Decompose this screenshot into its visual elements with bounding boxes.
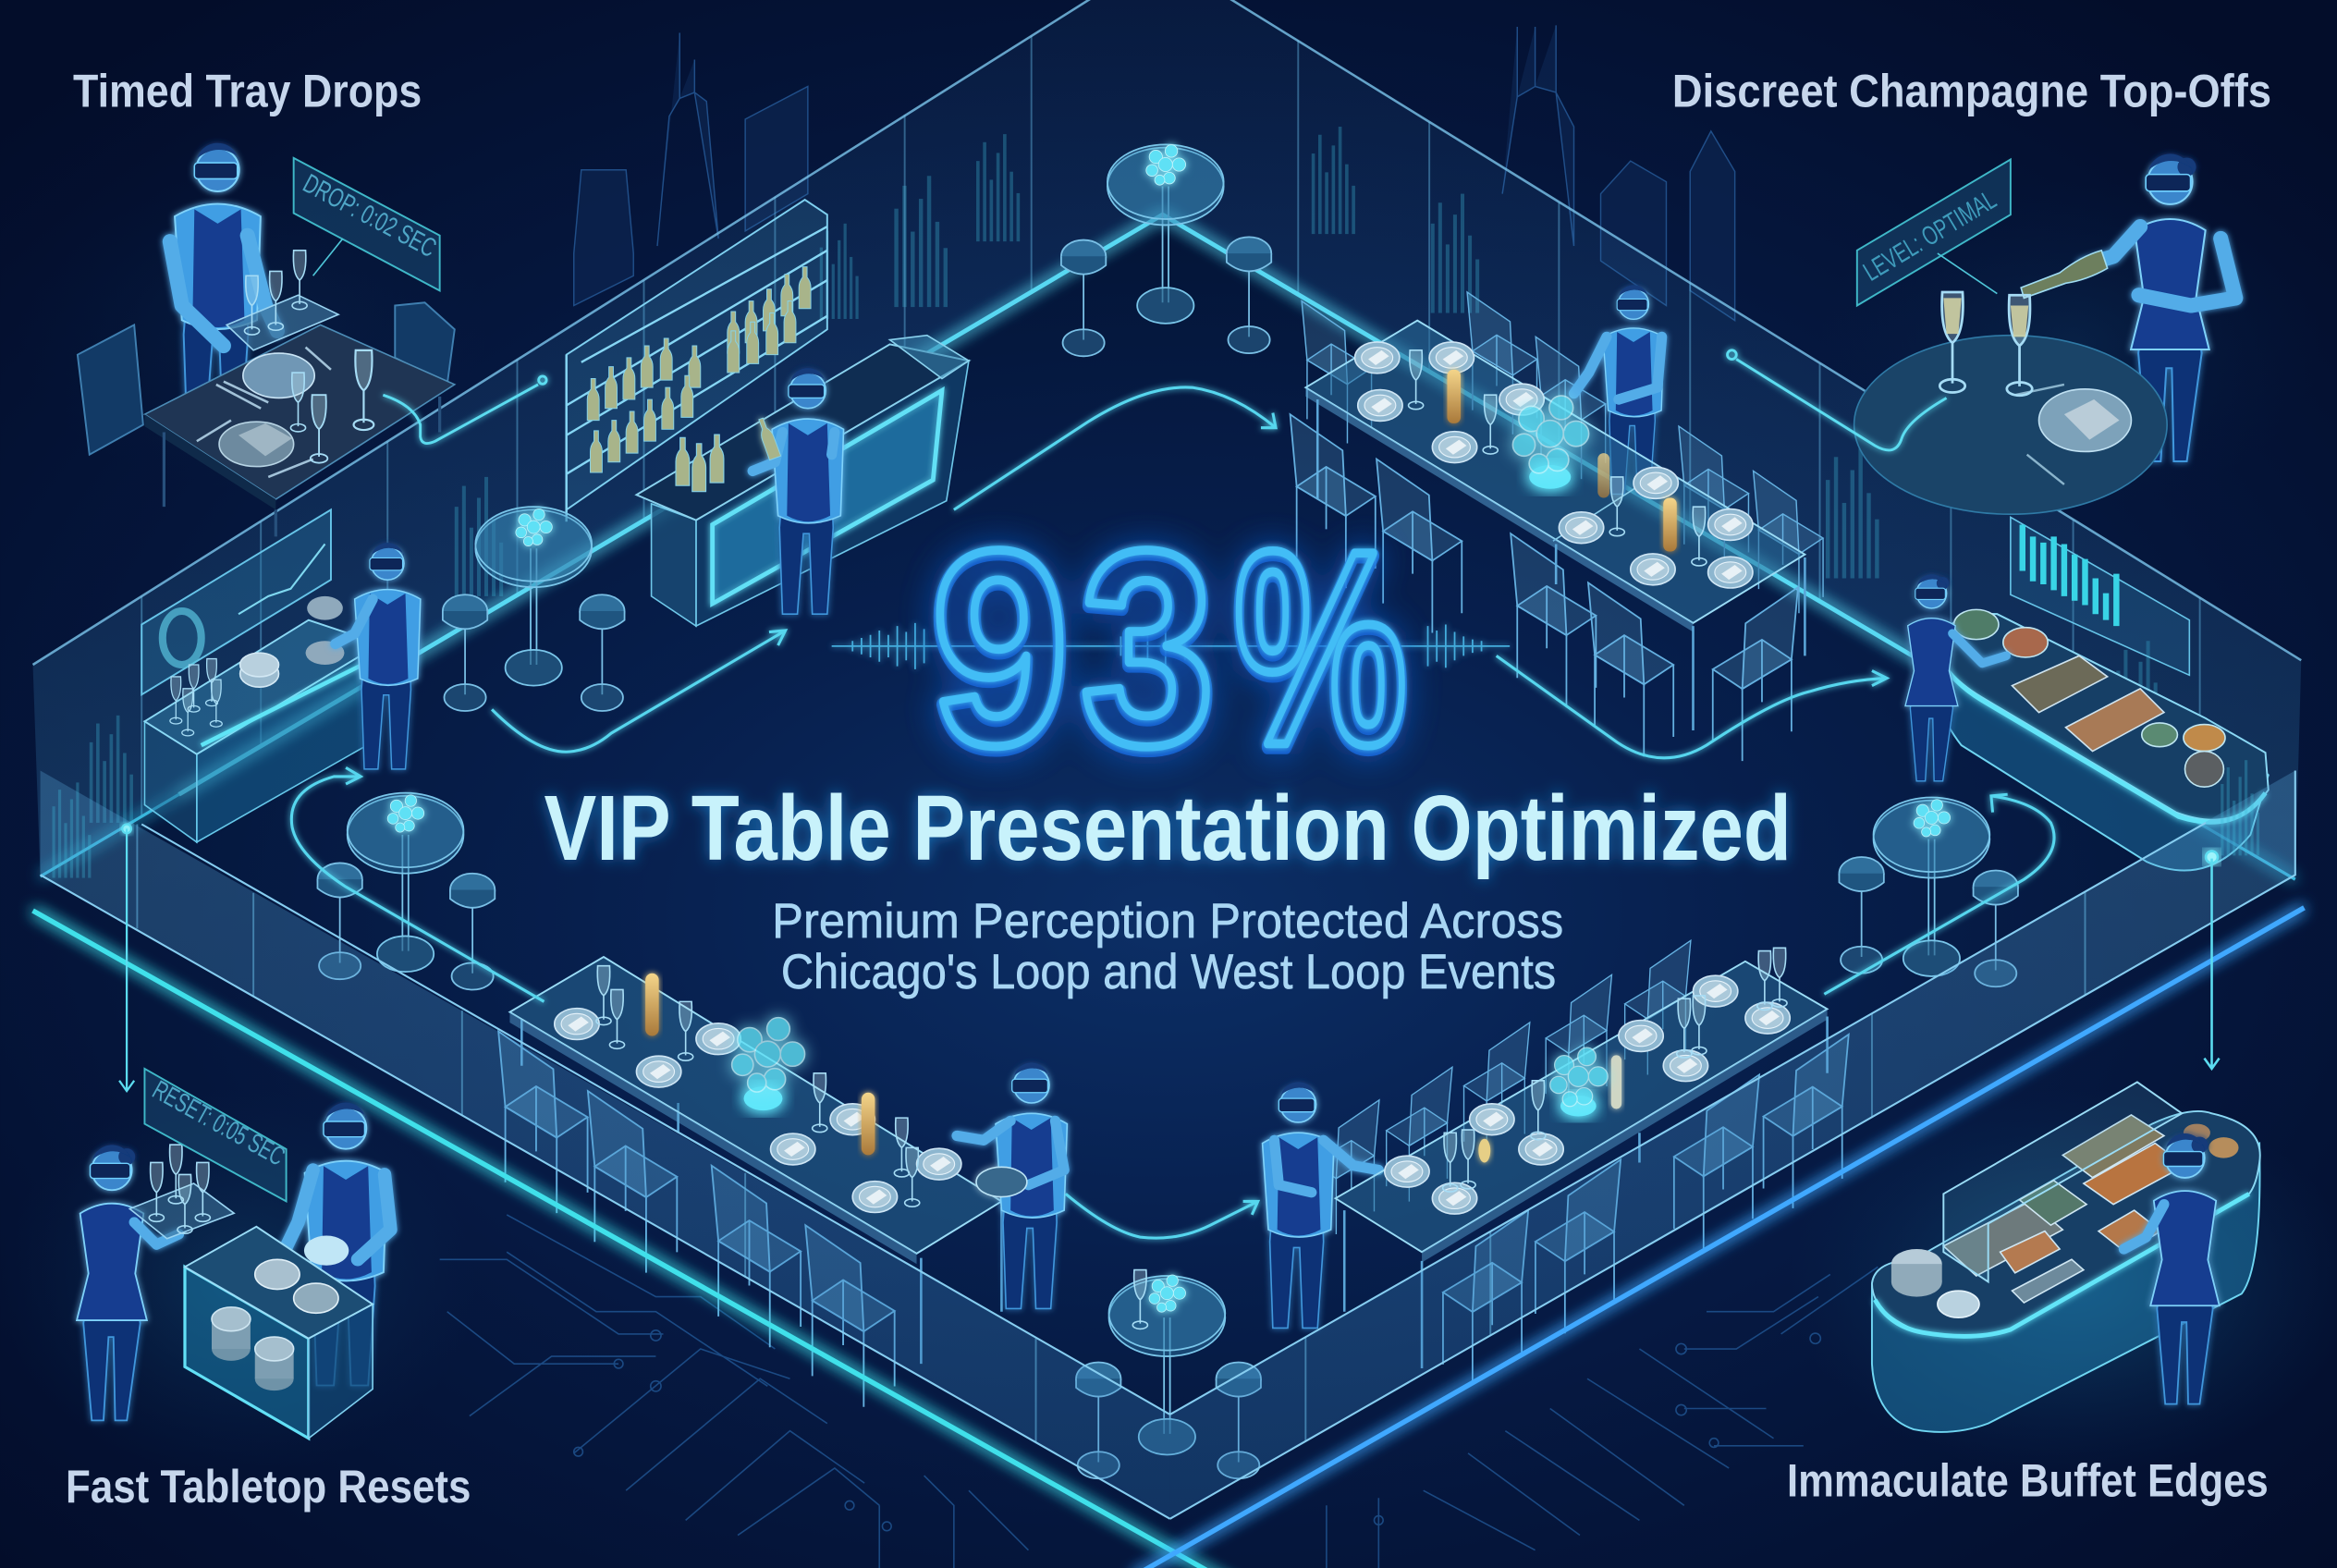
headline stat: 93% [932,493,1407,806]
glow layer: 9 [932,496,1069,806]
sign: drop time: DROP: 0:02 SEC [298,169,441,263]
tray and glasses [129,1145,234,1239]
glow layer: % [1234,496,1407,806]
vignette: discreet champagne top-offs [1728,153,2235,514]
label: discreet champagne top-offs: Discreet Champagne Top-Offs [1672,65,2271,116]
interior floor [41,214,2295,1513]
round table [1854,336,2167,514]
counter [1872,1111,2260,1432]
vertical pointer: right [2204,851,2220,1069]
sign: reset time [144,1069,289,1201]
long table: upper right [1291,285,1823,761]
server [2123,1133,2220,1404]
Chicago skyline [574,25,1735,321]
vignette: timed tray drops [78,143,546,536]
bottle and flutes [1939,251,2108,396]
panel: front-left wall [41,770,1170,1519]
tray and glasses [226,251,338,350]
vertical pointer: left [119,825,134,1091]
panel: back-right glass wall [1159,0,2301,879]
server [336,543,421,769]
tabletop [509,957,1001,1364]
neon outline: 3 [1081,493,1215,802]
near chairs [1291,414,1798,761]
centre waveform [832,623,1510,669]
main title: VIP Table Presentation Optimized [544,778,1792,880]
arrow: lower left [291,767,544,1001]
table chairs [78,302,455,455]
server [1263,1082,1378,1328]
panel: front-right wall [1170,760,2295,1519]
high table: lower left [317,793,495,989]
long table: lower left [498,957,1067,1407]
server pouring [2084,153,2235,461]
subtitle line 1: Premium Perception Protected Across [772,894,1563,949]
cart [185,1227,373,1439]
place settings [197,348,373,477]
panel: back-left glass wall [33,0,1163,876]
vignette: right buffet [1905,517,2269,871]
far chairs [1302,292,1823,613]
neon line: front-right [1132,908,2304,1568]
server [1574,285,1664,494]
bar counter [636,336,969,626]
glow layer [932,496,1407,806]
high table: centre bottom [1076,1270,1261,1478]
server [1905,574,2006,781]
connector [1728,350,1947,450]
label: fast tabletop resets: Fast Tabletop Resets [66,1461,471,1513]
station counter [144,596,380,842]
front glass walls [33,760,2304,1568]
sign: drop time [294,158,441,290]
analytics screen [141,509,331,694]
label: immaculate buffet edges: Immaculate Buffet Edges [1787,1455,2269,1507]
tabletop [1336,948,1828,1368]
arrow: lower centre [1066,1194,1258,1238]
arrow: to right buffet [1497,655,1887,758]
neon floor line: back [41,214,2295,879]
vignette: left service station [141,509,421,842]
vignette: fast tabletop resets [77,1069,390,1439]
bartender [752,368,844,614]
arrow: up right [1824,794,2054,994]
vignette: immaculate buffet edges [1872,1082,2260,1432]
server with plate [280,1103,390,1386]
label: timed tray drops: Timed Tray Drops [73,65,422,116]
flow arrows [291,387,2054,1238]
sneeze guard [1943,1082,2182,1281]
sign: reset time: RESET: 0:05 SEC [147,1075,289,1172]
counter [1935,609,2269,871]
neon line: front-left [33,911,1237,1568]
table [144,325,455,536]
vignette: bar [567,200,969,626]
high table: left [443,507,625,711]
sign: level: LEVEL: OPTIMAL [1858,185,2001,288]
tabletop [1305,321,1805,730]
near chairs [1443,1035,1849,1384]
analytics screen [2011,517,2189,675]
arrow: to bar [492,631,786,752]
subtitle line 2: Chicago's Loop and West Loop Events [781,945,1556,999]
connector [383,376,546,444]
sign: level [1857,160,2011,305]
neon outline [932,493,1407,802]
server [957,1062,1067,1308]
waiter [170,143,277,438]
high table: centre top [1061,144,1271,356]
neon outline: 9 [932,493,1069,802]
server with tray [77,1145,179,1420]
glow layer: 3 [1081,496,1215,806]
far chairs [1314,940,1691,1234]
chairs [498,1032,895,1407]
subtitle [772,894,1563,999]
arrow: to top table [954,387,1276,509]
circuit traces [440,1215,1878,1568]
back walls [33,0,2301,879]
high table: lower right [1839,798,2018,986]
neon outline: % [1234,493,1407,802]
bottle shelves [567,200,827,521]
long table: lower right [1263,940,1849,1384]
